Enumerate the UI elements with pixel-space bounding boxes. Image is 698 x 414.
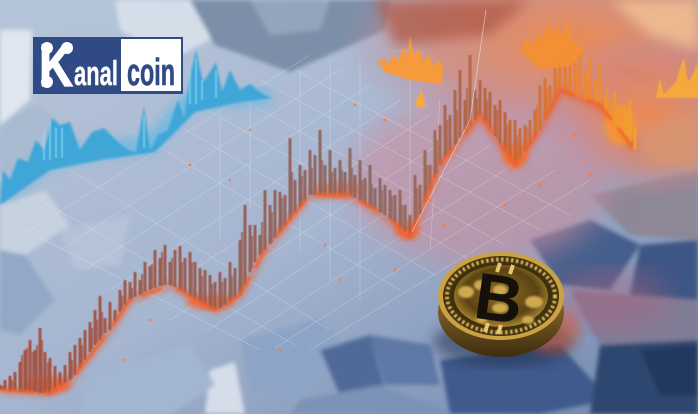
coin relief patches [458, 280, 543, 324]
map grid lines [15, 55, 590, 350]
ember dots [124, 104, 592, 361]
coin edge [438, 267, 564, 357]
thin white trend line [412, 10, 486, 232]
blue glow chart [0, 50, 272, 205]
logo text coin: coin [127, 52, 175, 94]
orange background peaks [378, 20, 698, 108]
logo text anal: anal [74, 55, 118, 93]
warm orange glow: upper right [340, 0, 698, 330]
chart glow beneath spikes [0, 90, 636, 394]
bitcoin symbol: B [470, 258, 528, 338]
spiky price chart [0, 48, 635, 393]
logo: Kanalcoin [33, 32, 183, 99]
bitcoin coin [433, 252, 580, 366]
logo white box [121, 39, 181, 91]
patchy orange chart base line [0, 90, 635, 393]
coin face [438, 252, 564, 340]
logo K: K [39, 32, 73, 99]
